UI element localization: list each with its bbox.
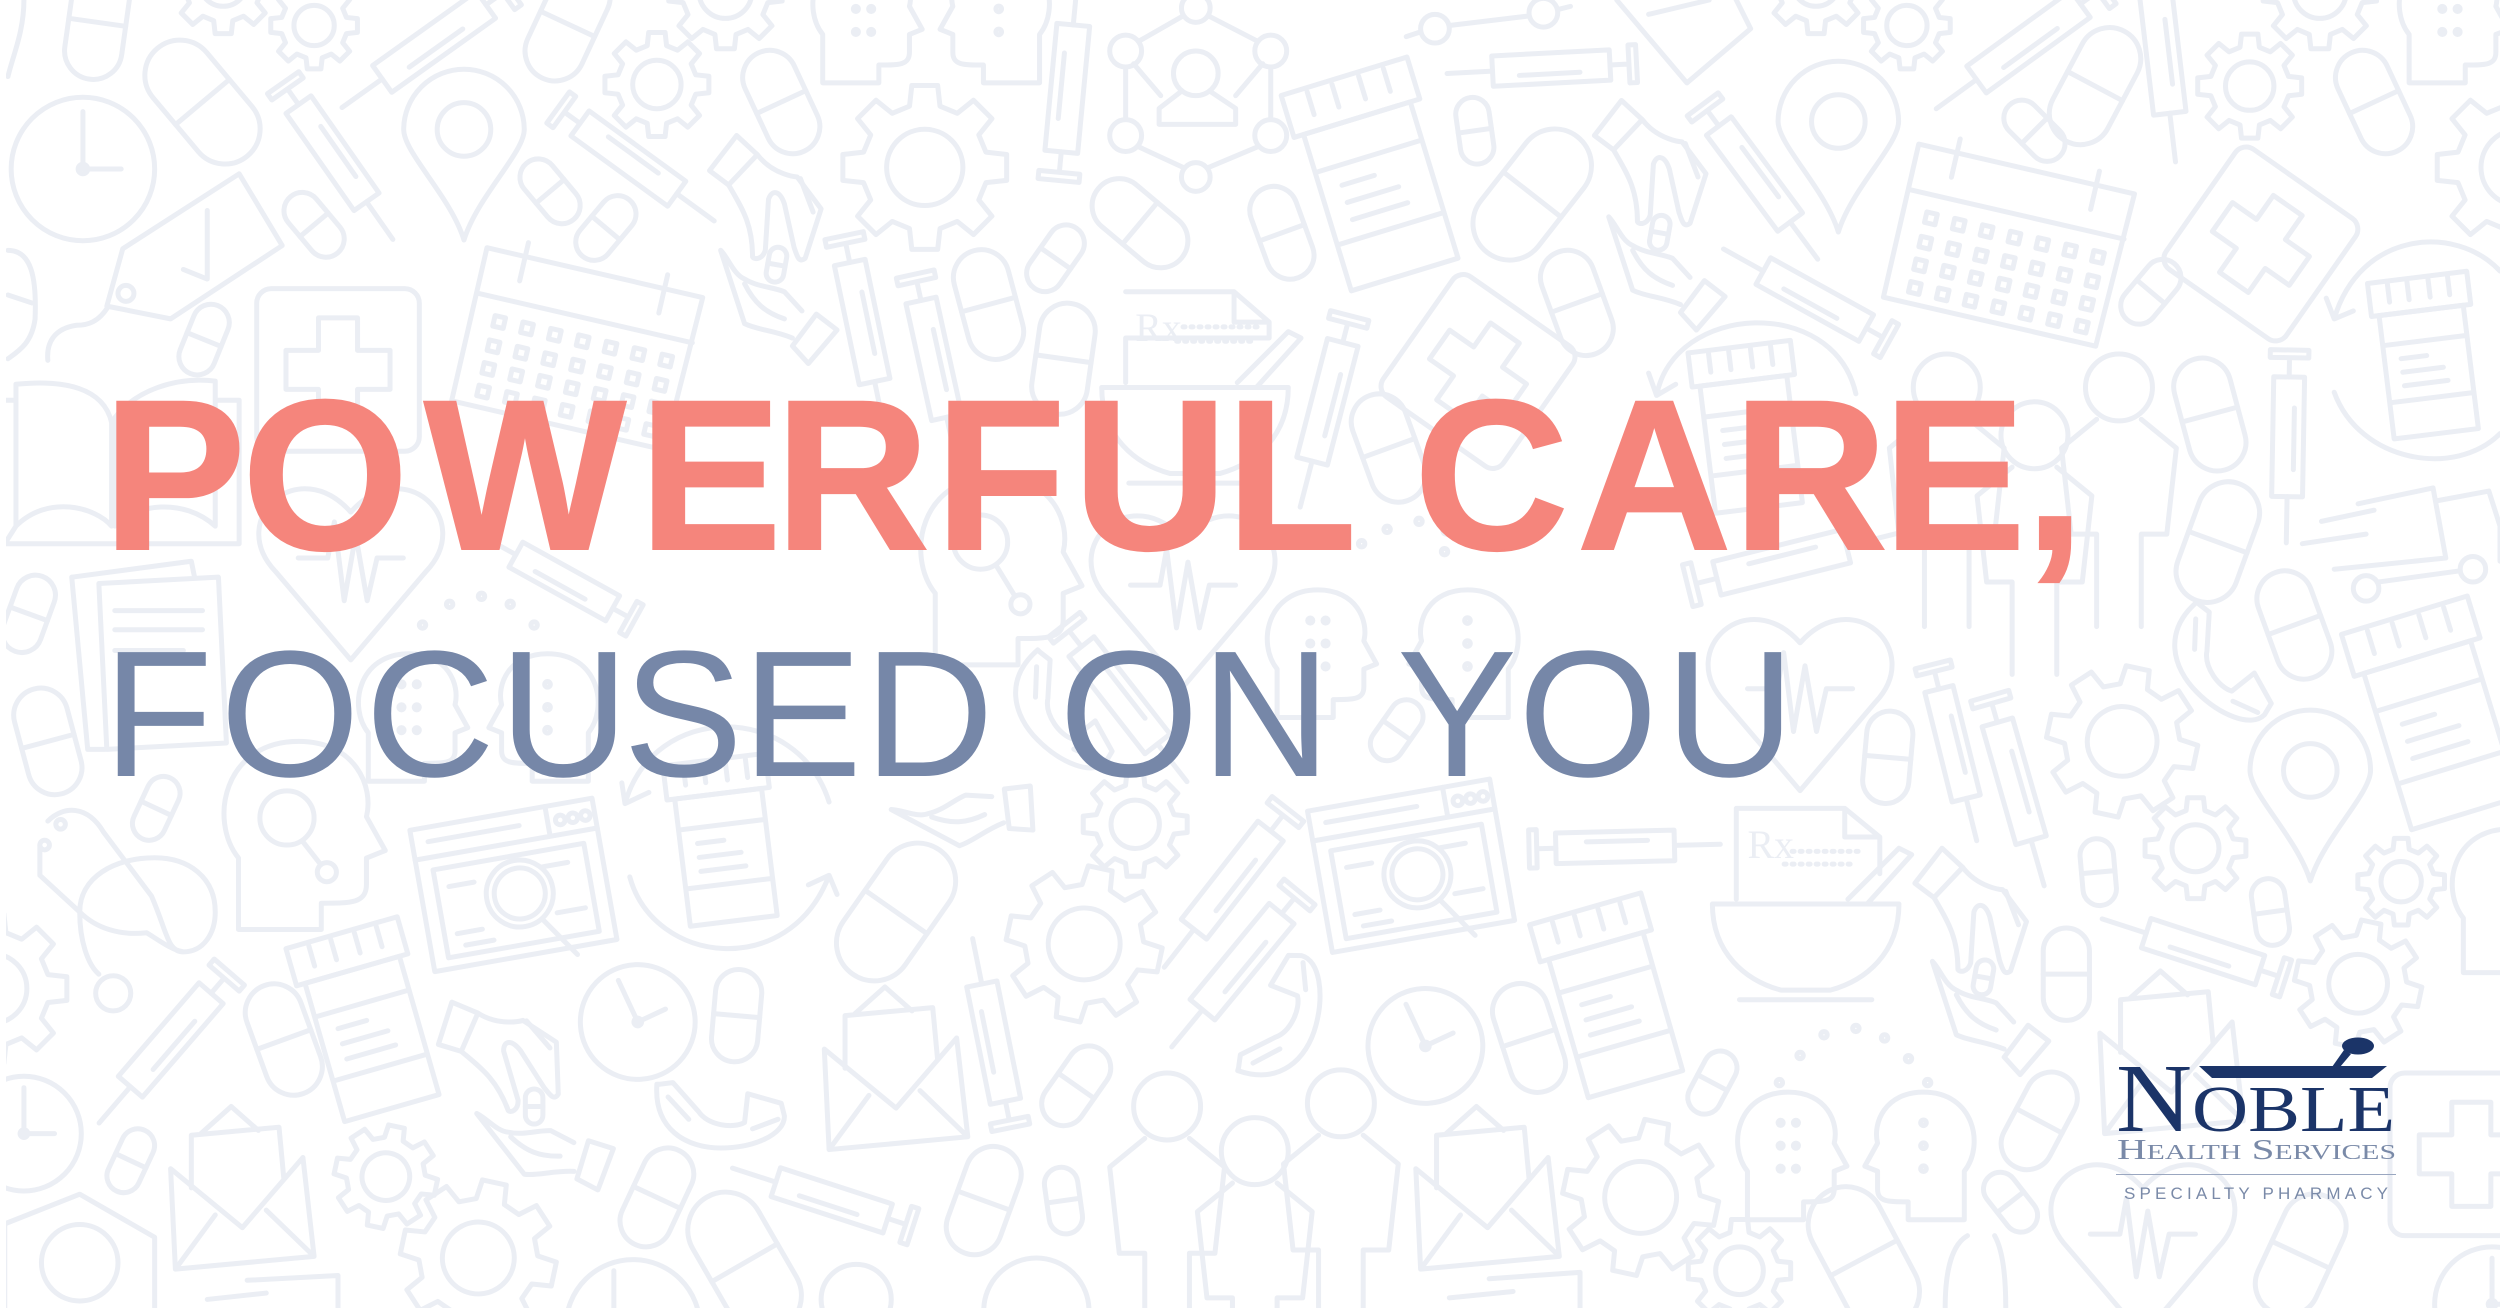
logo icon: mortar pestle bar	[2199, 1038, 2387, 1078]
subheadline: FOCUSED ON YOU: FOCUSED ON YOU	[103, 614, 1795, 815]
logo divider	[2116, 1174, 2396, 1175]
logo: Noble Health Services Specialty Pharmacy	[2116, 1038, 2396, 1203]
logo line: Health Services: H EALTH S ERVICES	[2117, 1134, 2396, 1166]
logo wordmark: NOBLE: N	[2116, 1045, 2192, 1152]
logo: Noble Health Services Specialty Pharmacy: OBLE	[2192, 1073, 2395, 1146]
background icon pattern: Rx	[1747, 822, 1794, 867]
left page margin	[0, 0, 6, 1308]
logo line: Specialty Pharmacy: SPECIALTY PHARMACY	[2124, 1184, 2388, 1203]
headline: POWERFUL CARE,: POWERFUL CARE,	[103, 356, 2084, 595]
background icon pattern: Rx	[1135, 305, 1182, 350]
